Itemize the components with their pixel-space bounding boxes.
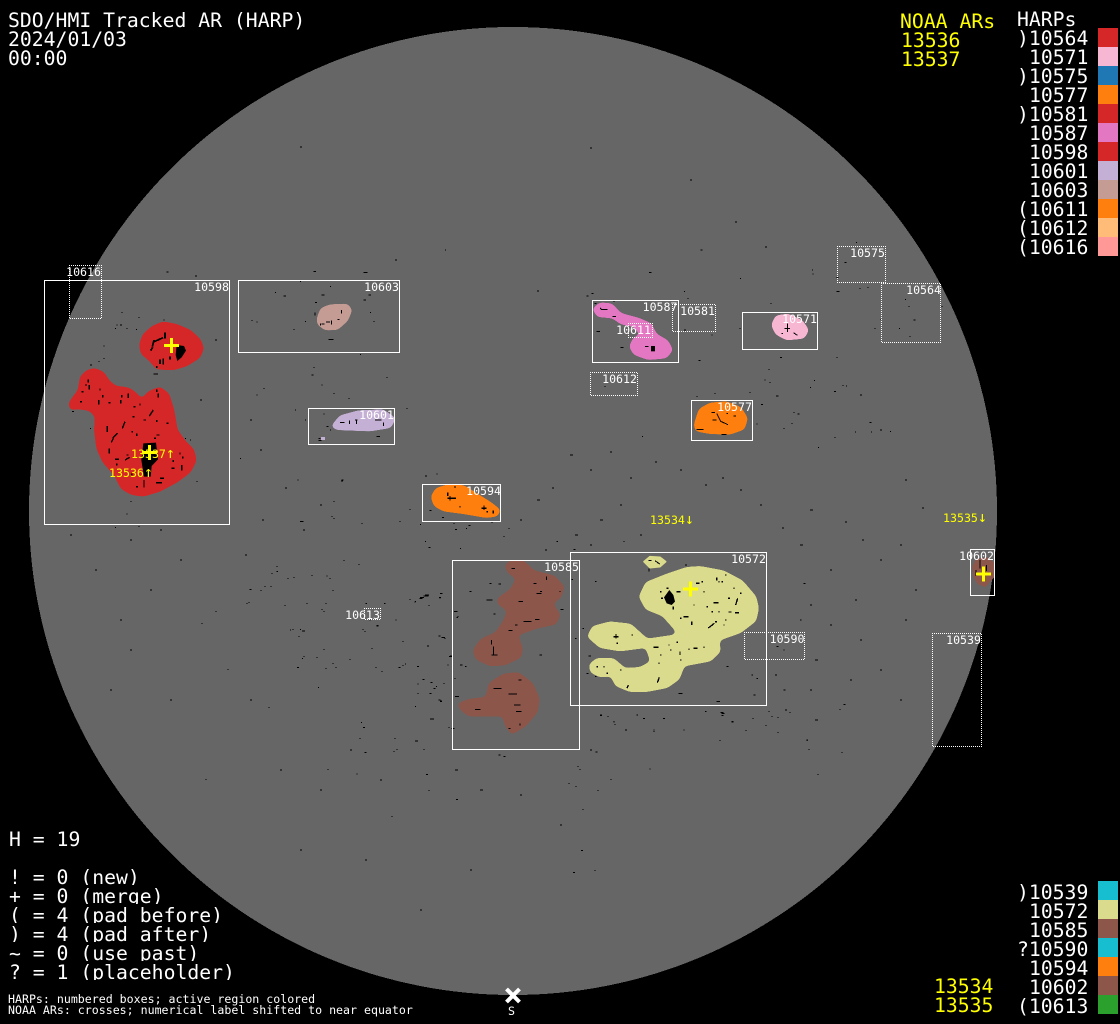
- HARPs legend bottom: (10613: [1017, 995, 1088, 1018]
- HARP box 10585: [452, 560, 580, 750]
- status key: ? = 1 (placeholder): [9, 961, 235, 984]
- NOAA ARs list top: 13537: [901, 48, 960, 71]
- title block: 2024/01/03: [8, 28, 127, 51]
- HARP box 10577: [692, 400, 752, 440]
- HARP box 10616: [66, 265, 102, 318]
- NOAA AR labels on disk: 13536↑: [109, 463, 153, 481]
- HARPs legend top: 10601: [1029, 160, 1088, 183]
- south pole marker: [506, 989, 520, 1018]
- active region 10572 (main): [588, 567, 758, 691]
- NOAA ARs list bottom: 13534: [934, 975, 993, 998]
- HARP box 10594: [422, 484, 501, 522]
- colour swatches top: [1098, 28, 1118, 256]
- status key: ) = 4 (pad after): [9, 923, 211, 946]
- active region 10602: [973, 558, 993, 586]
- active region 10594: [431, 484, 500, 517]
- HARPs legend bottom: 10585: [1029, 919, 1088, 942]
- NOAA AR labels on disk: 13537↑: [131, 444, 175, 462]
- active region 10572 (small lobe): [644, 557, 666, 572]
- HARP box 10587: [592, 300, 678, 362]
- HARPs legend top: )10581: [1017, 103, 1088, 126]
- HARP box 10572: [570, 552, 766, 706]
- active region 10585 (upper lobe): [473, 561, 564, 666]
- footnote: [8, 992, 413, 1017]
- HARPs legend top: )10564: [1017, 27, 1088, 50]
- title block: 00:00: [8, 47, 67, 70]
- footnote: NOAA ARs: crosses; numerical label shifted to near equator: [8, 1003, 413, 1017]
- HARP box 10594: 10594: [466, 484, 501, 498]
- active region 10598 (lower lobe): [69, 369, 196, 496]
- HARP box 10601: 10601: [359, 408, 394, 422]
- title block: [8, 9, 305, 70]
- HARP box 10564: 10564: [906, 283, 941, 297]
- HARP box 10564: [882, 283, 941, 342]
- NOAA ARs list top: 13536: [901, 29, 960, 52]
- NOAA ARs list bottom: 13535: [934, 994, 993, 1017]
- HARP box 10602: 10602: [959, 549, 994, 563]
- NOAA cross 13536/13537 region markers: [142, 338, 991, 596]
- active region 10577: [694, 402, 747, 434]
- HARP box 10571: 10571: [782, 312, 817, 326]
- HARP box 10572: 10572: [731, 552, 766, 566]
- NOAA AR labels on disk: 13535↓: [943, 508, 987, 526]
- HARP box 10616: 10616: [66, 265, 101, 279]
- HARPs legend top: )10575: [1017, 65, 1088, 88]
- status key: [0, 866, 240, 985]
- status key: ! = 0 (new): [9, 866, 140, 889]
- HARP box 10612: [590, 372, 638, 396]
- NOAA AR labels on disk: [109, 444, 987, 528]
- HARP box 10539: 10539: [946, 633, 981, 647]
- HARPs legend bottom: ?10590: [1017, 938, 1088, 961]
- HARP box 10598: [44, 280, 230, 524]
- HARP box 10602: [959, 549, 994, 596]
- HARP box 10581: 10581: [680, 304, 715, 318]
- HARPs legend top: [1017, 8, 1088, 259]
- NOAA ARs list top: NOAA ARs: [900, 10, 995, 33]
- HARP box 10601: [308, 408, 394, 444]
- HARP box 10571: [742, 312, 818, 350]
- HARPs legend bottom: )10539: [1017, 881, 1088, 904]
- HARPs legend top: (10611: [1017, 198, 1088, 221]
- HARP box 10575: 10575: [850, 246, 885, 260]
- NOAA AR labels on disk: 13534↓: [650, 510, 694, 528]
- title block: SDO/HMI Tracked AR (HARP): [8, 9, 305, 32]
- active region 10571: [772, 314, 808, 340]
- HARP box 10612: 10612: [602, 372, 637, 386]
- status key: + = 0 (merge): [9, 885, 164, 908]
- HARP box 10587: 10587: [643, 300, 678, 314]
- HARPs legend top: 10603: [1029, 179, 1088, 202]
- HARP box 10539: [932, 633, 982, 746]
- HARPs legend top: 10587: [1029, 122, 1088, 145]
- HARPs legend top: 10571: [1029, 46, 1088, 69]
- footnote: HARPs: numbered boxes; active region colored: [8, 992, 315, 1006]
- HARP box 10585: 10585: [544, 560, 579, 574]
- HARPs legend top: HARPs: [1017, 8, 1076, 31]
- HARP box 10590: [744, 632, 805, 660]
- NOAA ARs list top: [900, 10, 995, 71]
- HARPs legend bottom: [1017, 881, 1088, 1018]
- HARP box 10613: 10613: [345, 608, 380, 622]
- HARP box 10575: [838, 246, 886, 282]
- HARP box 10577: 10577: [717, 400, 752, 414]
- HARPs legend bottom: 10602: [1029, 976, 1088, 999]
- HARP box 10590: 10590: [770, 632, 805, 646]
- colour swatches bottom: [1098, 881, 1118, 1014]
- HARP box 10598: 10598: [194, 280, 229, 294]
- HARP box 10603: 10603: [364, 280, 399, 294]
- south pole marker: S: [508, 1004, 515, 1018]
- HARPs legend top: (10612: [1017, 217, 1088, 240]
- active region 10603: [315, 304, 352, 339]
- HARPs legend top: 10598: [1029, 141, 1088, 164]
- HARPs legend bottom: 10572: [1029, 900, 1088, 923]
- active regions 10587: [593, 303, 672, 359]
- status key: ( = 4 (pad before): [9, 904, 223, 927]
- HARPs legend top: (10616: [1017, 236, 1088, 259]
- HARPs legend top: 10577: [1029, 84, 1088, 107]
- active region 10585 (lower lobe): [458, 673, 539, 734]
- HARP box 10603: [238, 280, 400, 352]
- NOAA ARs list bottom: [934, 975, 993, 1017]
- HARP box 10611: 10611: [616, 323, 651, 337]
- H count: H = 19: [9, 828, 80, 851]
- status key: ~ = 0 (use past): [9, 942, 199, 965]
- background sunspot speckles: [70, 147, 943, 910]
- active region 10598 (upper lobe): [140, 322, 203, 369]
- HARPs legend bottom: 10594: [1029, 957, 1088, 980]
- active region 10601: [318, 410, 395, 441]
- HARP box 10581: [672, 304, 716, 332]
